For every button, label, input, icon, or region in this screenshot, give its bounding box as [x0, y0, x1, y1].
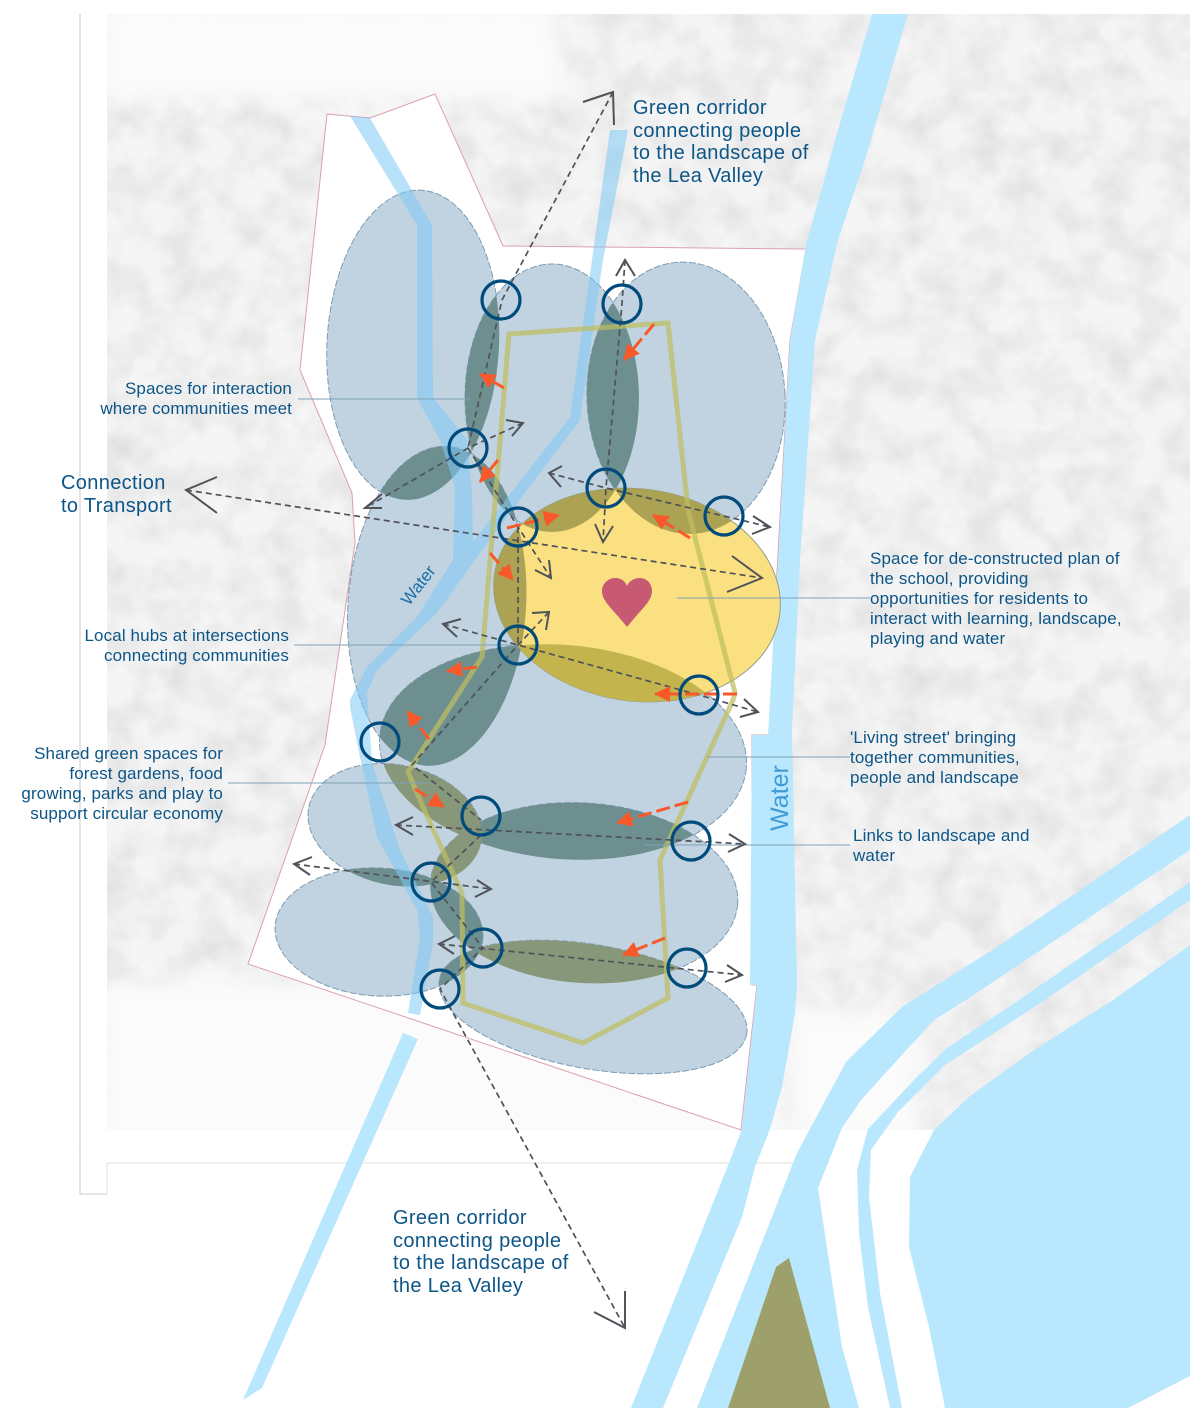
text: green corridor north: the Lea Valley: [633, 165, 763, 187]
text: green corridor north: connecting people: [633, 120, 801, 142]
text: de-constructed school space: playing and water: [870, 629, 1006, 648]
text: spaces for interaction: Spaces for interaction: [125, 379, 292, 398]
leader lines: [228, 399, 870, 845]
text: shared green spaces: support circular economy: [30, 804, 223, 823]
local hub circles: [361, 281, 743, 1008]
text: connection to transport: Connection: [61, 472, 166, 494]
water label: river: Water: [766, 765, 794, 831]
heart: [602, 578, 652, 627]
narrow canal: [857, 882, 1190, 1408]
text: de-constructed school space: interact with learning, landscape,: [870, 609, 1122, 628]
lower stream: [243, 1033, 418, 1400]
olive island: [728, 1258, 830, 1408]
text: green corridor north: to the landscape of: [633, 142, 809, 164]
text: green corridor south: connecting people: [393, 1230, 561, 1252]
community ellipses: [272, 186, 792, 1095]
text: local hubs: connecting communities: [104, 646, 289, 665]
spaces for interaction: overlap lenses: [272, 257, 792, 1095]
canal band with olive island: [697, 815, 1190, 1408]
connection arrows (dashed): [186, 92, 770, 1328]
main river water: [631, 14, 908, 1408]
text: de-constructed school space: the school, providing: [870, 569, 1028, 588]
text: links to landscape: water: [852, 846, 895, 865]
text: de-constructed school space: Space for de-constructed plan of: [870, 549, 1120, 568]
text: shared green spaces: growing, parks and play to: [21, 784, 223, 803]
text: living street: together communities,: [850, 748, 1020, 767]
text: shared green spaces: forest gardens, food: [69, 764, 223, 783]
text: links to landscape: Links to landscape and: [853, 826, 1030, 845]
text: shared green spaces: Shared green spaces for: [34, 744, 223, 763]
text: green corridor south: to the landscape of: [393, 1252, 569, 1274]
text: spaces for interaction: where communities meet: [99, 399, 292, 418]
text: green corridor south: the Lea Valley: [393, 1275, 523, 1297]
site boundary: [248, 94, 806, 1130]
water label: stream: Water: [397, 562, 440, 609]
text: de-constructed school space: opportunities for residents to: [870, 589, 1088, 608]
text: living street: people and landscape: [850, 768, 1019, 787]
lake: [909, 945, 1190, 1408]
text: green corridor south: Green corridor: [393, 1207, 527, 1229]
text: living street: 'Living street' bringing: [850, 728, 1016, 747]
orange movement arrows: [407, 324, 737, 955]
text: connection to transport: to Transport: [61, 495, 172, 517]
central yellow de-constructed school space: [480, 470, 794, 720]
text: green corridor north: Green corridor: [633, 97, 767, 119]
streams crossing the site: [350, 116, 628, 1015]
site frame outline: [80, 14, 800, 1194]
text: local hubs: Local hubs at intersections: [84, 626, 289, 645]
living street route: [408, 323, 735, 1043]
